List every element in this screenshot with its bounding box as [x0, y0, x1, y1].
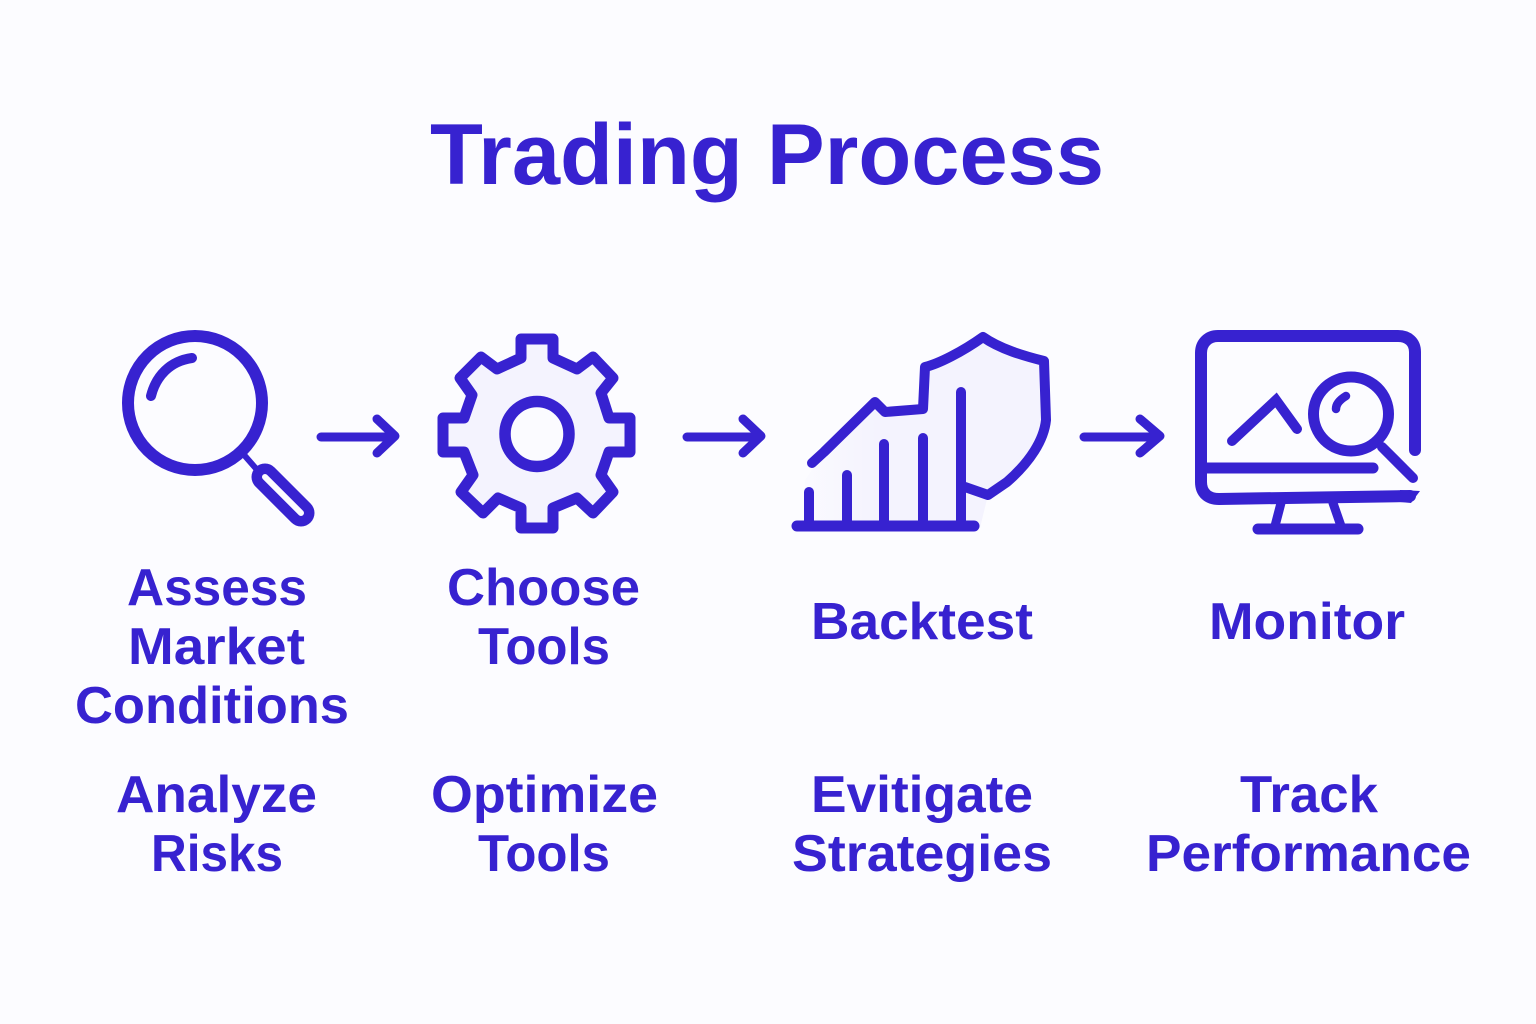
label: Choose Tools [447, 559, 640, 676]
label: Optimize Tools: Tools [478, 825, 610, 883]
icon: magnifying glass [128, 336, 301, 513]
icon: gear [443, 339, 630, 528]
icon: bar chart with shield [797, 337, 1046, 528]
label: Track Performance [1146, 766, 1471, 883]
label: Analyze Risks: Risks [151, 825, 283, 883]
label: Evitigate Strategies [792, 766, 1052, 883]
label: Analyze Risks [116, 766, 317, 883]
arrow: step 1 to step 2 [321, 419, 395, 453]
arrow: step 3 to step 4 [1084, 419, 1160, 453]
label: Assess Market Conditions: Conditions [75, 677, 349, 735]
label: Choose Tools: Choose [447, 559, 640, 617]
label: Evitigate Strategies: Strategies [792, 825, 1052, 883]
label: Optimize Tools: Optimize [431, 766, 658, 824]
label: Evitigate Strategies: Evitigate [811, 766, 1033, 824]
label: Choose Tools: Tools [478, 618, 610, 676]
title: Trading Process [430, 107, 1104, 203]
label: Assess Market Conditions: Assess [127, 559, 307, 617]
label: Assess Market Conditions: Market [128, 618, 305, 676]
arrow: step 2 to step 3 [687, 419, 761, 453]
label: Assess Market Conditions [75, 559, 349, 735]
label: Track Performance: Track [1240, 766, 1378, 824]
icon: monitor with magnifier [1201, 336, 1420, 529]
label: Backtest: Backtest [811, 593, 1033, 651]
label: Optimize Tools [431, 766, 658, 883]
label: Monitor: Monitor [1209, 593, 1405, 651]
label: Analyze Risks: Analyze [116, 766, 317, 824]
label: Track Performance: Performance [1146, 825, 1471, 883]
